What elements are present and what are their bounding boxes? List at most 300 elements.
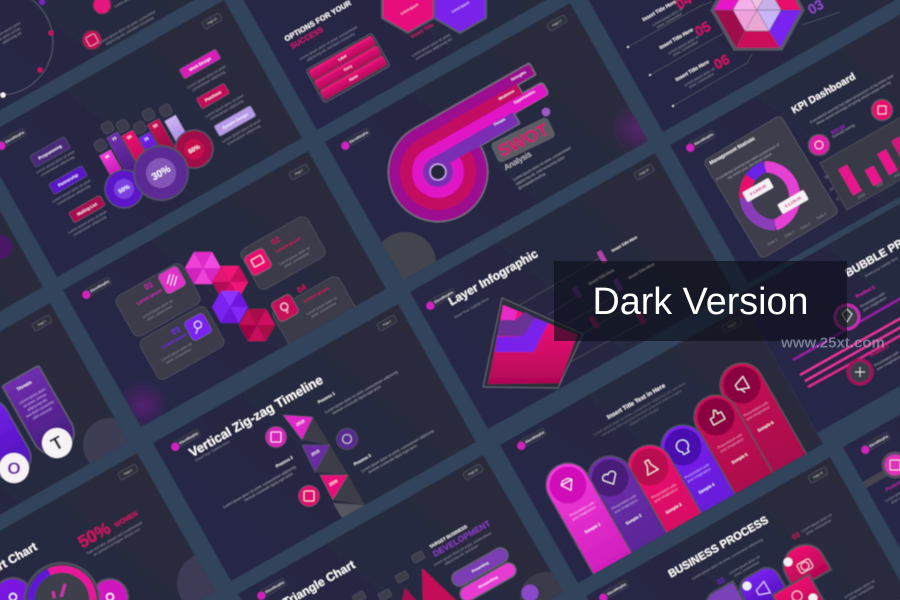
kpi value: $99.00 <box>830 124 847 137</box>
leader lines <box>520 258 650 365</box>
logo <box>597 580 630 600</box>
text 01: amet, consectetur <box>146 304 174 322</box>
hexagon pink <box>382 0 434 33</box>
text: programming: Lorem ipsum dolor sit amet <box>36 150 75 175</box>
hexagon: crimson <box>239 309 275 341</box>
value tag <box>742 178 774 202</box>
grey blob <box>83 418 137 472</box>
text 03: Lorem ipsum dolor sit <box>801 513 832 533</box>
page label: Page 16 <box>812 470 824 479</box>
logo: ElevoMorphic <box>607 582 627 596</box>
legend: Data 4 <box>816 212 827 220</box>
axis labels <box>824 171 900 201</box>
stripes <box>793 293 900 387</box>
text block: consectetur adipiscing elit <box>415 37 453 61</box>
text 02: Lorem ipsum dolor sit <box>729 555 760 575</box>
page label <box>721 317 743 333</box>
label 04: Lorem ipsum <box>303 286 330 304</box>
panel: KPI dashboard slide <box>670 6 900 283</box>
tag: Work Design: Work Design <box>188 56 212 72</box>
card text: my entire soul, like these sweet <box>727 152 772 180</box>
layer purple <box>497 312 535 336</box>
panel: SWOT slide <box>325 3 666 294</box>
band text: Strengths <box>510 70 527 82</box>
label 01: Lorem ipsum <box>136 288 163 306</box>
pill button purple: Presenting <box>471 561 489 574</box>
bars <box>865 166 882 186</box>
label title: Insert Title Here <box>628 262 655 280</box>
text 04: amet, consectetur <box>310 301 338 319</box>
page label: Page 5 <box>123 468 133 476</box>
column 3 <box>620 437 768 600</box>
icon: bubble <box>883 453 900 477</box>
labels <box>572 250 646 329</box>
intro text: nonummy nibh euismod tincidunt ut laoreet dolore magna <box>601 389 682 437</box>
watermark: www.25xt.com <box>780 334 885 352</box>
pill button purple <box>449 545 511 589</box>
label title: Insert Title Here <box>588 268 615 286</box>
block lilac <box>701 581 749 600</box>
column 6: your imagination <box>746 405 771 422</box>
item text: amet, consectetur <box>656 11 684 29</box>
product 2: Product 2 <box>869 343 890 358</box>
tag: Programming: Programming <box>37 143 63 161</box>
letter T <box>37 423 77 463</box>
text block: Lorem ipsum dolor sit amet, consectetuer <box>433 531 493 567</box>
column 6: Presentation with <box>743 401 769 418</box>
page label <box>633 164 655 180</box>
step badges <box>742 558 818 600</box>
process 1 text: Aenean commodo ligula eget dolor <box>332 384 383 415</box>
bar values <box>104 123 158 160</box>
icon: thumb <box>707 407 725 425</box>
axis labels: 2021 <box>875 181 884 189</box>
grey blob <box>520 572 572 600</box>
icon 03 <box>183 312 213 342</box>
band opportunities <box>403 83 568 207</box>
bubble 1 <box>835 305 859 329</box>
icon: kpi circle <box>808 134 830 156</box>
item title: Insert Title Here <box>659 27 695 51</box>
banner <box>554 261 847 341</box>
column 5: Presentation with <box>717 433 743 450</box>
text: purchase: Lorem ipsum dolor sit amet <box>205 94 244 119</box>
tag: Purchase <box>196 83 230 109</box>
number 03: 03 <box>791 532 801 542</box>
panel: layer infographic slide <box>410 153 733 429</box>
page label: Page 7 <box>37 319 47 327</box>
value tag: $ 2,100.00 <box>784 196 802 208</box>
panel: stacked column slide <box>500 306 860 600</box>
tag: System Design: System Design <box>221 111 249 130</box>
stat value: 50% <box>75 519 114 552</box>
icon: flask <box>641 458 658 475</box>
orbit dots <box>0 0 54 98</box>
title: BUSINESS PROCESS <box>666 514 771 581</box>
text: mailing: Lorem ipsum dolor sit amet <box>68 210 107 235</box>
icon: megaphone <box>733 376 750 395</box>
outline <box>369 61 581 241</box>
tag: Work Design <box>179 49 221 79</box>
intro text: Lorem ipsum dolor sit amet, consectetuer adipiscing elit, sed diam <box>593 381 686 437</box>
layer violet <box>495 318 548 352</box>
process 3: Process 3 <box>353 452 372 467</box>
connector bar <box>858 467 892 491</box>
number 02: 02 <box>270 234 282 247</box>
subtitle: Lorem ipsum dolor sit amet, consectetur adipiscing <box>691 537 764 581</box>
panel: circular timeline slide <box>0 0 194 110</box>
text 02: Lorem ipsum dolor sit <box>279 246 310 266</box>
kpi text: Concept seeing <box>832 123 855 139</box>
value tags <box>352 551 425 600</box>
intro text: these sweet mornings of spring which I enjoy with my <box>816 80 892 126</box>
page label <box>288 164 310 180</box>
orbit arc <box>0 0 53 95</box>
logo <box>80 277 113 300</box>
grey blob <box>177 553 237 600</box>
bars <box>838 164 862 196</box>
text 02: amet, consectetur <box>283 251 311 269</box>
heading accent: SUCCESS <box>289 25 325 51</box>
pill text: sed diam nonummy <box>25 400 55 419</box>
column 1 <box>538 455 686 600</box>
logo <box>859 432 892 455</box>
bottom triangle <box>333 503 365 518</box>
glow <box>117 379 169 431</box>
logo <box>424 288 457 311</box>
title: Vertical Zig-zag Timeline <box>186 372 325 460</box>
button Name: Name <box>349 74 359 82</box>
heading: DEVELOPMENT <box>431 518 493 559</box>
card 01 <box>114 261 202 339</box>
value tag: $ 4,900.00 <box>749 184 767 196</box>
bubble 50%: 50% <box>118 184 132 195</box>
item text: Lorem ipsum dolor sit <box>652 7 683 27</box>
triangles <box>401 568 462 600</box>
text block: adipiscing elit <box>2 31 22 45</box>
column 2: your imagination <box>614 498 639 515</box>
tag: Mailing List: Mailing List <box>76 201 98 217</box>
bar values: 35 <box>143 135 150 142</box>
donut chart <box>745 167 795 225</box>
icon: heart <box>601 470 620 488</box>
page label <box>807 467 829 483</box>
bubble 60%: 60% <box>188 144 202 156</box>
hexagon violet <box>434 0 486 33</box>
column 1: Sample 1 <box>584 521 602 535</box>
process 1: Process 1 <box>317 390 336 405</box>
page label <box>201 13 223 29</box>
band threats <box>418 112 528 192</box>
card 02 <box>239 214 327 292</box>
logo: ElevoMorphic <box>694 132 714 146</box>
panel: left edge slide <box>0 149 43 426</box>
process 3 text: Lorem ipsum dolor sit amet, consectetuer adipiscing <box>360 429 435 473</box>
tag: System Design <box>214 105 256 137</box>
logo: ElevoMorphic <box>869 434 889 448</box>
text block: Lorem ipsum dolor sit amet, consectetuer <box>299 25 359 61</box>
text: partnership: consectetuer adipiscing <box>56 184 91 206</box>
icon pink <box>298 486 320 506</box>
logo: ElevoMorphic <box>434 290 454 304</box>
eyebrow: TARGET BUSINESS <box>429 524 468 549</box>
icon magenta <box>266 426 286 448</box>
text block: adipiscing elit, sed diam nonummy <box>306 32 356 62</box>
page label <box>462 464 484 480</box>
legend: Data 2 <box>784 230 795 238</box>
layer magenta <box>501 305 517 320</box>
text: system design: Lorem ipsum dolor sit amet <box>222 119 261 144</box>
page label: Page 4 <box>727 321 737 329</box>
item title: Insert Title Here <box>675 59 711 83</box>
title: Layer Infographic <box>446 246 541 308</box>
pill O <box>0 392 38 486</box>
number 05: 05 <box>692 18 713 39</box>
axis labels: 10 <box>829 186 834 192</box>
column 3: Sample 3 <box>665 501 683 515</box>
bar values: 54 <box>126 133 133 140</box>
process 1 text: Lorem ipsum dolor sit amet, consectetuer adipiscing <box>324 370 399 414</box>
number 03: 03 <box>170 324 182 337</box>
column 5: your imagination <box>720 437 745 454</box>
panel: SWOT pills slide <box>0 303 137 581</box>
column 4: Sample 4 <box>698 481 716 495</box>
subtitle: Insert your subtitle here <box>864 256 899 278</box>
column 4 <box>653 417 801 600</box>
connector triangles <box>302 417 365 505</box>
title: KPI Dashboard <box>790 71 858 116</box>
icon: bars <box>52 584 67 598</box>
value tag <box>777 190 809 214</box>
leader dots <box>627 46 674 107</box>
plate knob <box>542 108 550 116</box>
glow <box>610 100 666 156</box>
stat text: Nam nisl felis, aliquet sed condimentum <box>86 521 143 556</box>
panel: business process slide <box>586 457 900 600</box>
chart main ring <box>25 563 99 600</box>
bars <box>891 136 900 162</box>
text block: adipiscing elit, sed diam nonummy <box>105 16 155 46</box>
icon: bulb <box>674 438 692 456</box>
text 03: Lorem ipsum dolor sit <box>161 342 192 362</box>
logo: ElevoMorphic <box>265 580 285 594</box>
text: mailing: consectetuer adipiscing <box>72 215 107 237</box>
intro text: aliquam erat volutpat <box>628 407 659 427</box>
bubble 2 <box>848 360 872 384</box>
title: Insert Title Text in Here <box>606 383 667 421</box>
pill T <box>2 365 81 462</box>
chart side bubble magenta <box>92 579 128 600</box>
panel: options slide <box>239 0 562 130</box>
pill text: sit amet, consec <box>23 392 47 409</box>
hex text: Lorem ipsum <box>451 0 470 14</box>
tag: Partnership <box>49 165 87 195</box>
leader lines <box>628 2 840 106</box>
icon: diamond <box>560 477 576 493</box>
column 6: Sample 6 <box>757 419 775 433</box>
text block: Lorem ipsum dolor sit amet, <box>411 32 452 58</box>
process 2 text: Lorem ipsum dolor sit amet, consectetuer adipiscing <box>222 465 297 509</box>
triangle 2018: 2018 <box>295 418 306 427</box>
item text: Lorem ipsum dolor sit <box>684 67 715 87</box>
icon: kpi circle <box>872 100 892 120</box>
triangle 2019 <box>302 445 330 472</box>
bubble 60% <box>174 129 214 170</box>
band weaknesses <box>386 84 554 224</box>
band text: Weakness <box>498 89 515 101</box>
process 3 text: Aenean commodo ligula eget dolor <box>368 443 419 474</box>
stat text: ac, posuere a magna. Donec non <box>93 527 141 557</box>
column 5 <box>686 387 834 600</box>
number 06: 06 <box>711 51 732 72</box>
button Label: Label <box>337 54 347 62</box>
page label <box>719 312 741 328</box>
panel: zig-zag timeline slide <box>153 304 476 581</box>
triangle 2020: 2020 <box>328 478 339 487</box>
text: partnership: Lorem ipsum dolor sit amet <box>52 179 91 204</box>
label: Insert Title <box>410 22 435 40</box>
bar icons <box>93 103 173 152</box>
text: work design: Lorem ipsum dolor sit amet <box>187 65 226 90</box>
bars <box>98 114 186 176</box>
process 2: Process 2 <box>275 454 294 469</box>
legend: Data 1 <box>767 238 778 246</box>
stat label: WOMEN <box>113 510 139 529</box>
page label: Page 3 <box>382 319 392 327</box>
bubble 30%: 30% <box>150 164 173 183</box>
bars <box>877 149 898 175</box>
panel: heart chart slide <box>0 453 237 600</box>
letter T: T <box>48 432 67 455</box>
pill button magenta <box>457 560 519 600</box>
text 02: amet, consectetur <box>733 560 761 578</box>
icon 01 <box>157 265 187 295</box>
column 4: Presentation with <box>684 463 710 480</box>
text: programming: consectetuer adipiscing <box>40 155 75 177</box>
Analysis: Analysis <box>503 150 533 172</box>
text: purchase: consectetuer adipiscing <box>209 99 244 121</box>
column 5: Sample 5 <box>731 451 749 465</box>
gem hexagon <box>711 0 804 50</box>
triangle 2018 <box>283 415 313 440</box>
page label: Page 4 <box>725 316 735 324</box>
hexagon: pink <box>212 266 248 298</box>
band text: Threats <box>493 117 506 127</box>
hexagon: magenta <box>185 252 221 284</box>
letter O <box>0 453 29 483</box>
statistic card <box>703 115 839 259</box>
text 01: Lorem ipsum dolor sit <box>142 299 173 319</box>
page label: Page 20 <box>467 467 479 476</box>
logo <box>255 578 288 600</box>
pill text: Lorem ipsum dolor <box>19 387 47 405</box>
logo: ElevoMorphic <box>90 279 110 293</box>
layered shape outline <box>483 298 583 388</box>
product 1: Product 1 <box>855 284 876 299</box>
column 1: your imagination <box>572 505 597 522</box>
letter O: O <box>7 459 21 478</box>
logo: ElevoMorphic <box>179 431 199 445</box>
column 3: your imagination <box>654 487 679 504</box>
column 2: Sample 2 <box>625 512 643 526</box>
label title: Insert Title Here <box>611 235 638 253</box>
bar values: 35 <box>104 153 111 160</box>
column 1: Presentation with <box>569 501 595 518</box>
axis labels: 20 <box>824 174 829 180</box>
icon purple <box>336 428 358 450</box>
column 3: Presentation with <box>651 483 677 500</box>
hole <box>427 161 449 183</box>
purple shape <box>0 235 12 259</box>
text block: Lorem ipsum dolor sit amet, consectetur <box>99 9 157 45</box>
logo: ElevoMorphic <box>525 430 545 444</box>
bubble 50% <box>104 168 143 210</box>
grey blob <box>374 232 436 294</box>
number 01: 01 <box>143 279 155 292</box>
item text: amet, consectetur <box>688 71 716 89</box>
block crimson lower <box>772 574 827 600</box>
subtitle: Insert Your Subtitle Here <box>195 440 230 462</box>
card text: A wonderful serenity has taken possession of <box>715 143 780 182</box>
column 2: Presentation with <box>611 494 637 511</box>
tag: Programming <box>29 136 71 168</box>
text 04: Lorem ipsum dolor sit <box>844 579 875 599</box>
text block: adipiscing elit. Sed nonummy dolor <box>515 155 566 186</box>
page label: Page 20 <box>638 167 650 176</box>
logo <box>684 130 717 153</box>
panel: right corner slide <box>843 308 900 585</box>
hex text: Lorem ipsum <box>400 2 419 16</box>
intro text: A wonderful serenity has taken possession of my entire soul <box>809 74 894 124</box>
column 4: your imagination <box>687 467 712 484</box>
logo <box>515 428 548 451</box>
icon 04 <box>270 293 300 323</box>
tag: Partnership: Partnership <box>57 172 79 188</box>
logo: ElevoMorphic <box>5 130 25 144</box>
button stack <box>306 33 390 103</box>
bar chart with bubbles <box>93 103 214 210</box>
text: work design: consectetuer adipiscing <box>191 70 226 92</box>
legend <box>767 212 827 246</box>
product 1 text: Presentation with <box>860 292 885 309</box>
band text: Opportunities <box>513 90 536 105</box>
ball <box>522 584 538 600</box>
text block: @simplephotoshop <box>517 172 546 191</box>
bubble 30% <box>132 144 190 202</box>
card title: Management Statistic <box>709 136 757 166</box>
triangle 2020 <box>320 475 348 500</box>
panel: triangle chart slide <box>238 455 572 600</box>
page label <box>117 464 139 480</box>
bar values: 70 <box>111 135 118 142</box>
column 2 <box>580 448 728 600</box>
band strengths <box>371 64 577 239</box>
item text: Lorem ipsum dolor sit <box>668 35 699 55</box>
card 04 <box>271 274 359 352</box>
triangle 2019: 2019 <box>310 448 321 457</box>
icon 02 <box>243 247 273 277</box>
chart panel <box>820 104 900 210</box>
block violet <box>735 563 791 600</box>
text: system design: consectetuer adipiscing <box>226 124 261 146</box>
page label: Page 7 <box>294 168 304 176</box>
logo <box>0 128 28 151</box>
page label: Page 17 <box>551 18 563 27</box>
icon: pink circle <box>93 0 111 14</box>
pill button magenta: Researching <box>478 575 499 589</box>
product 1 text: your imagination <box>862 296 887 312</box>
axis labels: 0 <box>836 197 839 201</box>
